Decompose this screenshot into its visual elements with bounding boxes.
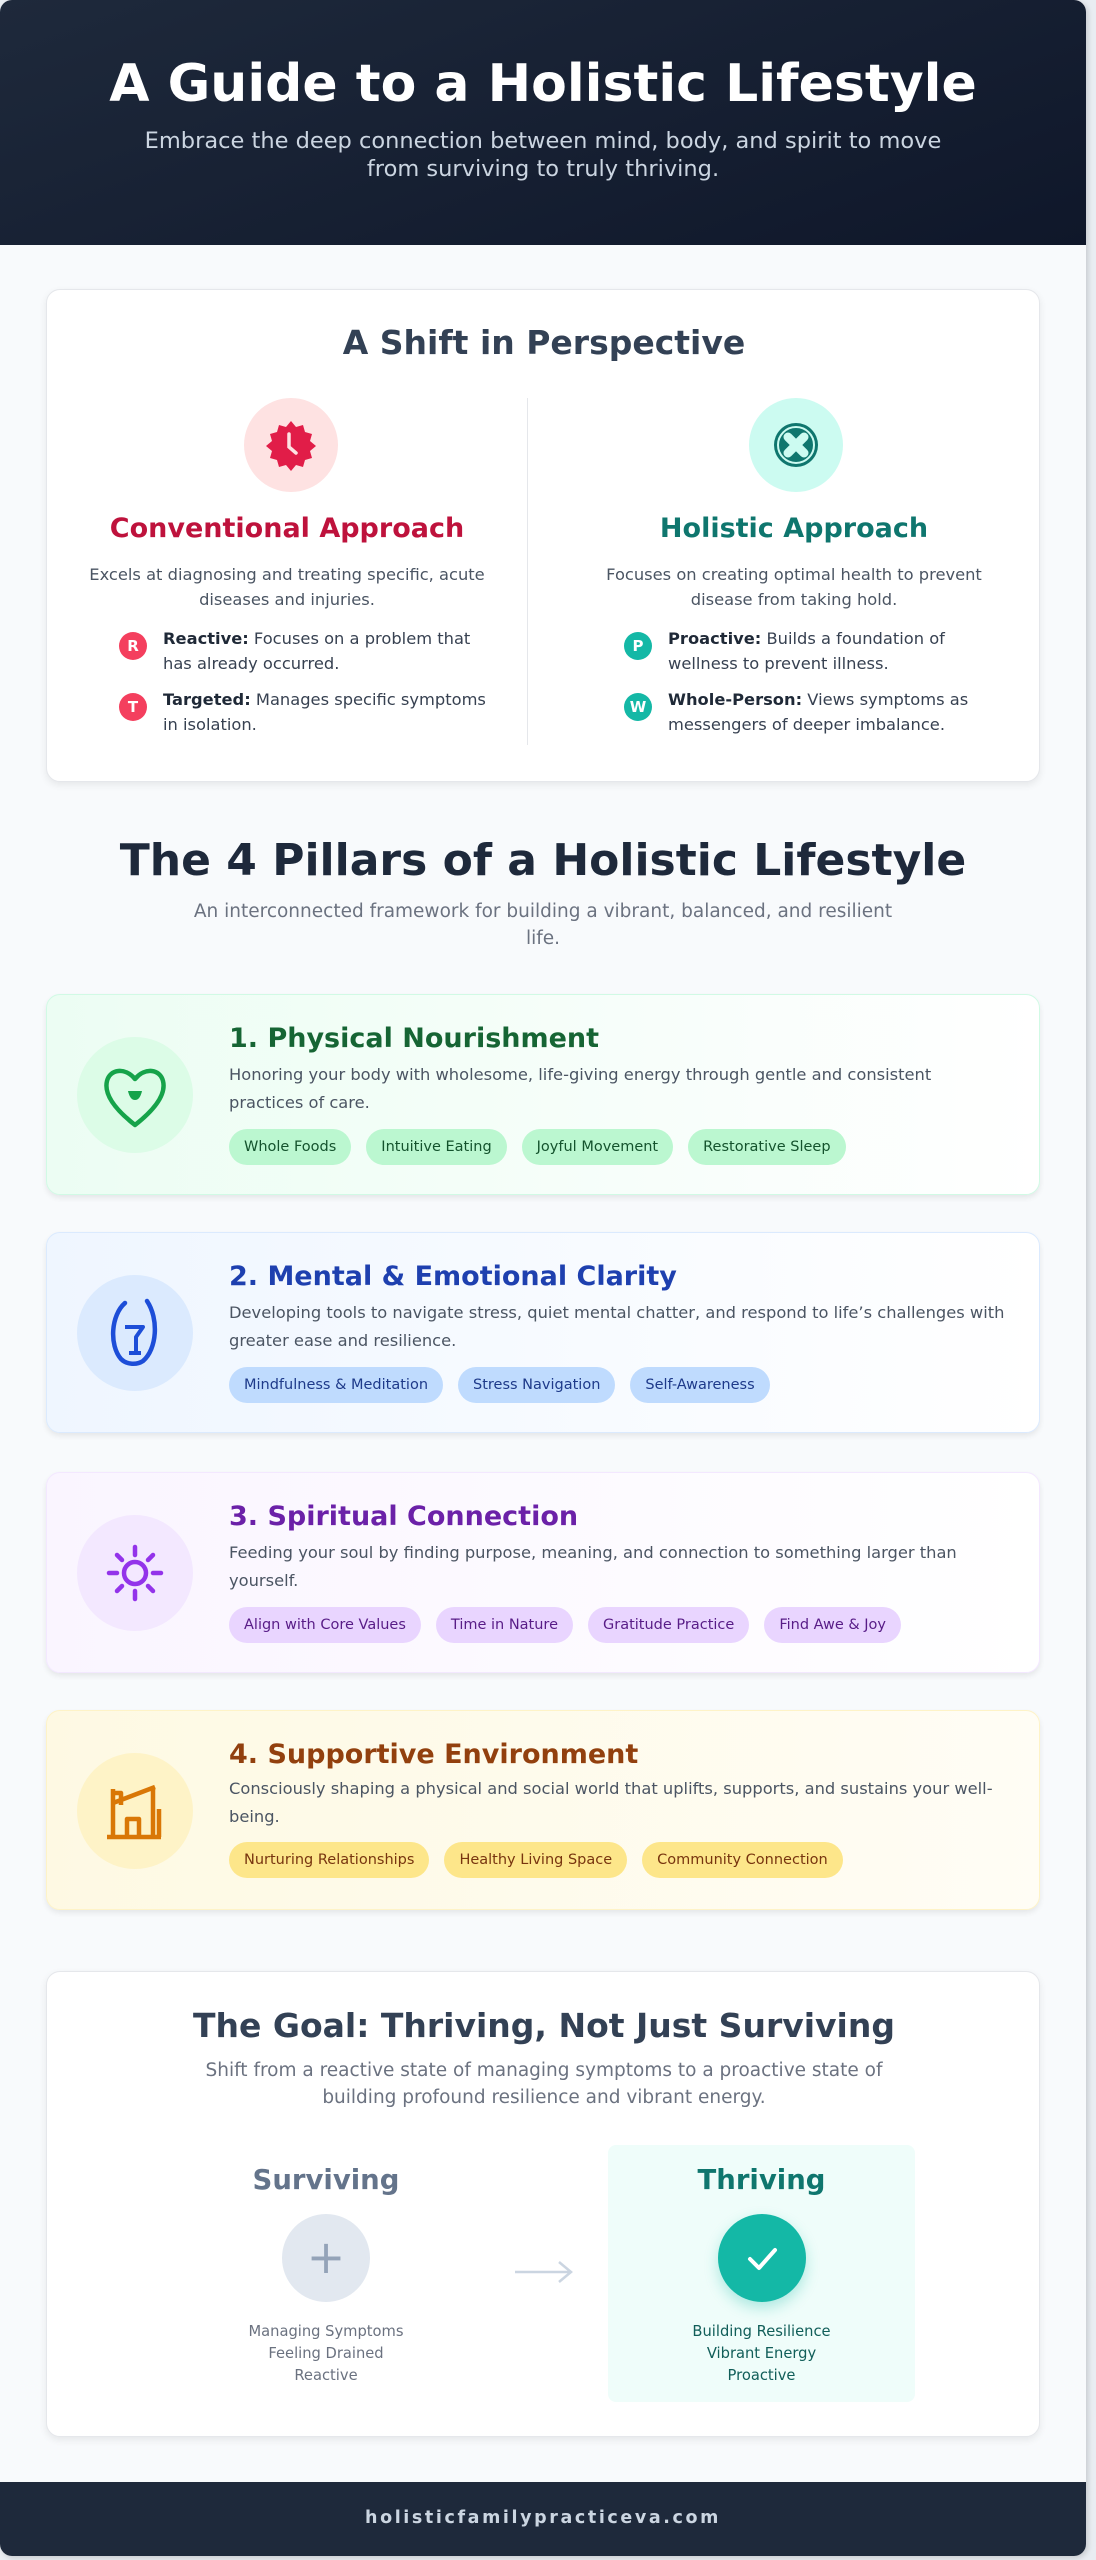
column: thriving: Thriving	[698, 2164, 825, 2196]
tags: Restorative Sleep	[703, 1139, 831, 1155]
column: holistic	[606, 398, 982, 734]
panel: physical nourishment	[46, 994, 1040, 1195]
bullet: targeted: T	[128, 698, 138, 716]
icon: plus: +	[307, 2230, 345, 2284]
heading: A Shift in Perspective	[343, 323, 745, 362]
icon: sun	[77, 1515, 193, 1631]
header	[0, 0, 1086, 245]
icon: check	[718, 2214, 806, 2302]
subtitle	[145, 128, 941, 182]
description: Consciously shaping a physical and social world that uplifts, supports, and sustains your well-being.	[229, 1779, 993, 1826]
tags: Joyful Movement	[537, 1139, 658, 1155]
description: Focuses on creating optimal health to prevent disease from taking hold.	[606, 565, 982, 609]
bullet: targeted: Targeted: Manages specific symptoms in isolation.	[163, 690, 486, 734]
tags: Healthy Living Space	[459, 1852, 612, 1868]
tags	[229, 1607, 901, 1643]
column: surviving: Surviving	[253, 2164, 399, 2196]
description: Honoring your body with wholesome, life-giving energy through gentle and consistent practices of care.	[229, 1065, 931, 1112]
icon: clock badge	[244, 398, 338, 492]
bullet: proactive: P	[632, 637, 644, 655]
description: Excels at diagnosing and treating specific, acute diseases and injuries.	[89, 565, 485, 609]
heading: conventional: Conventional Approach	[110, 513, 464, 544]
title: 3. Spiritual Connection	[229, 1501, 578, 1532]
column: thriving	[608, 2145, 915, 2402]
title: 2. Mental & Emotional Clarity	[229, 1261, 677, 1292]
icon: house	[77, 1753, 193, 1869]
panel: shift in perspective	[46, 289, 1040, 782]
tags: Gratitude Practice	[603, 1617, 734, 1633]
title: A Guide to a Holistic Lifestyle	[109, 54, 977, 114]
tags: Self-Awareness	[645, 1377, 755, 1393]
subheading: Shift from a reactive state of managing symptoms to a proactive state of building profound resilience and vibrant energy.	[206, 2060, 882, 2108]
icon: holistic	[749, 398, 843, 492]
description: Developing tools to navigate stress, quiet mental chatter, and respond to life’s challenges with greater ease and resilience.	[229, 1303, 1004, 1350]
icon: heart	[77, 1037, 193, 1153]
tags: Nurturing Relationships	[244, 1852, 414, 1868]
column: thriving: Vibrant Energy	[707, 2345, 816, 2362]
tags: Stress Navigation	[473, 1377, 600, 1393]
tags: Community Connection	[657, 1852, 828, 1868]
icon: plus	[282, 2214, 370, 2302]
tags: Mindfulness & Meditation	[244, 1377, 428, 1393]
heading: 4 pillars: The 4 Pillars of a Holistic Lifestyle	[120, 835, 966, 886]
subheading: pillars: An interconnected framework for building a vibrant, balanced, and resilient life.	[194, 901, 892, 949]
bullet: whole-person: Whole-Person: Views symptoms as messengers of deeper imbalance.	[668, 690, 968, 734]
heading: holistic: Holistic Approach	[660, 513, 928, 544]
column: conventional	[89, 398, 486, 734]
panel: mental clarity	[46, 1232, 1040, 1433]
column: thriving: Building Resilience	[692, 2323, 831, 2340]
tags: Align with Core Values	[244, 1617, 406, 1633]
arrow	[515, 2261, 573, 2283]
description: Feeding your soul by finding purpose, meaning, and connection to something larger than yourself.	[229, 1543, 957, 1590]
bullet: proactive: Proactive: Builds a foundation of wellness to prevent illness.	[668, 629, 945, 673]
tags: Intuitive Eating	[381, 1139, 492, 1155]
footer: holisticfamilypracticeva.com	[365, 2508, 721, 2528]
panel: supportive environment	[46, 1710, 1040, 1910]
footer	[0, 2482, 1086, 2556]
panel: the goal	[46, 1971, 1040, 2437]
tags	[229, 1367, 770, 1403]
tags: Time in Nature	[451, 1617, 558, 1633]
bullet: whole-person: W	[630, 698, 646, 716]
heading: The Goal: Thriving, Not Just Surviving	[193, 2006, 895, 2045]
bullet: reactive: Reactive: Focuses on a problem that has already occurred.	[163, 629, 470, 673]
column: surviving: Reactive	[294, 2367, 358, 2384]
icon: mind	[77, 1275, 193, 1391]
tags: Find Awe & Joy	[779, 1617, 886, 1633]
title: 4. Supportive Environment	[229, 1739, 638, 1770]
divider	[527, 398, 528, 745]
subtitle: from surviving to truly thriving.	[367, 156, 719, 182]
title: 1. Physical Nourishment	[229, 1023, 599, 1054]
tags: Whole Foods	[244, 1139, 336, 1155]
bullet: reactive: R	[127, 637, 139, 655]
tags	[229, 1129, 846, 1165]
subtitle: Embrace the deep connection between mind, body, and spirit to move	[145, 128, 941, 154]
column: surviving	[248, 2164, 404, 2384]
panel: spiritual connection	[46, 1472, 1040, 1673]
tags	[229, 1842, 843, 1878]
column: surviving: Feeling Drained	[268, 2345, 384, 2362]
column: thriving: Proactive	[728, 2367, 795, 2384]
column: surviving: Managing Symptoms	[248, 2323, 404, 2340]
